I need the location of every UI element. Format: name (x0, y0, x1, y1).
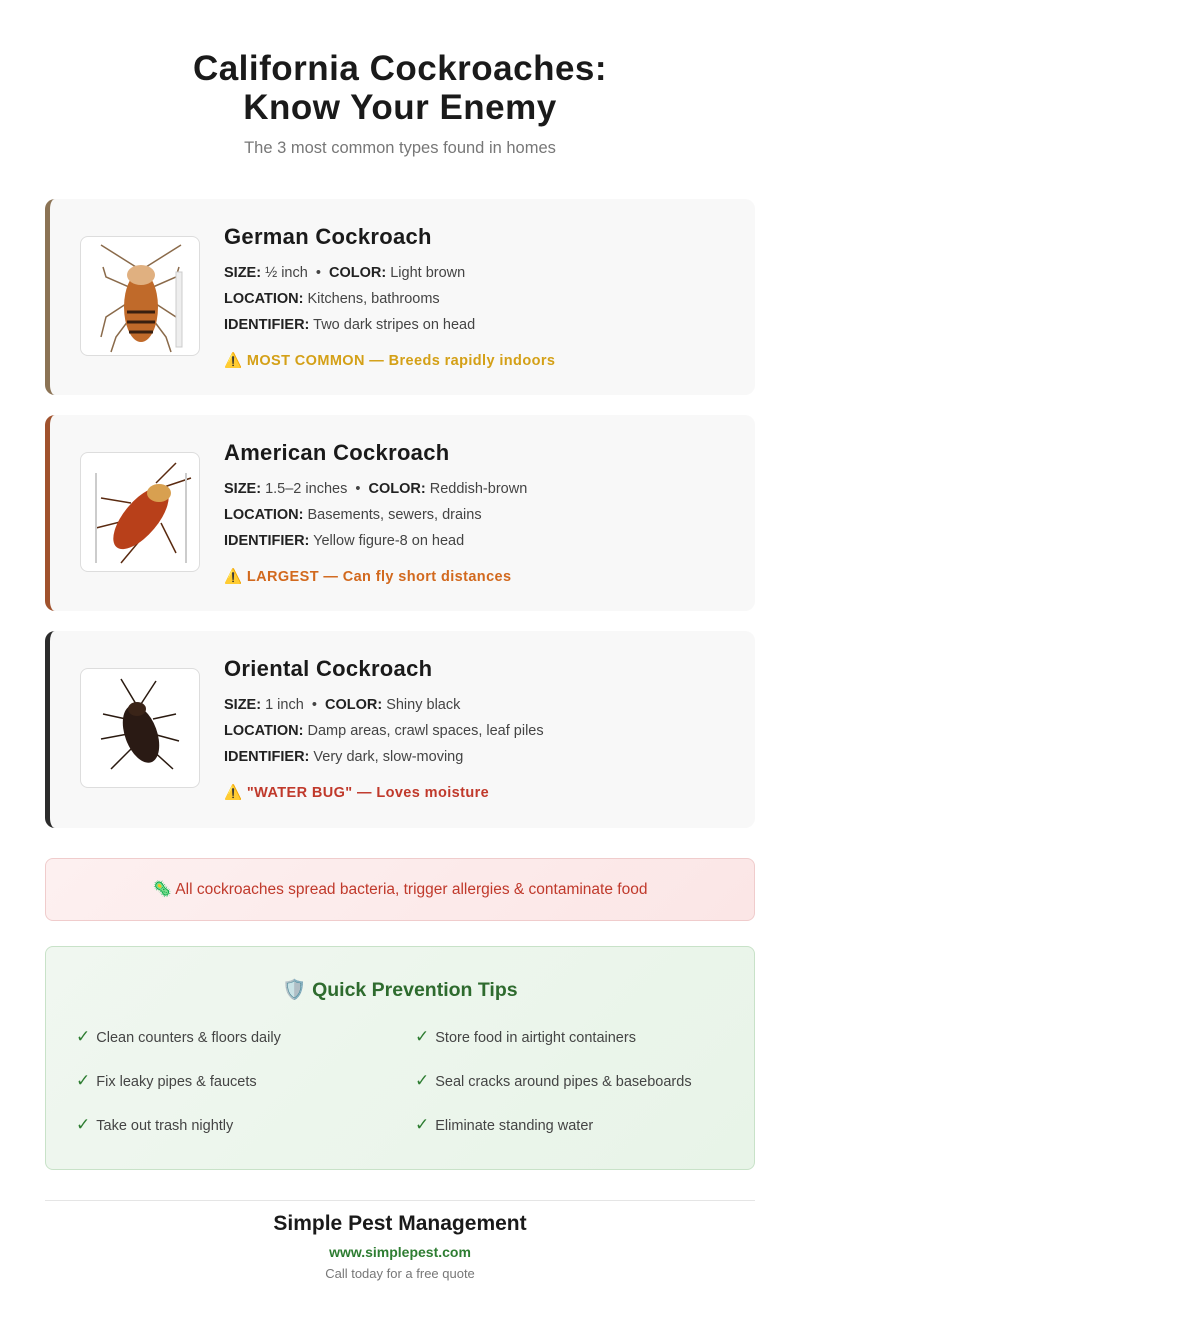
text: german details: LOCATION: Kitchens, bathrooms (224, 291, 440, 307)
tip list (76, 1027, 692, 1134)
subtitle: The 3 most common types found in homes (244, 139, 556, 157)
footer (273, 1212, 527, 1281)
heading: tips: 🛡️ Quick Prevention Tips (282, 979, 518, 1001)
text: american details: IDENTIFIER: Yellow figure-8 on head (224, 533, 464, 549)
text: oriental details (224, 656, 544, 801)
callout: health warning (45, 858, 755, 921)
callout: health warning: 🦠 All cockroaches spread bacteria, trigger allergies & contaminate food (153, 881, 647, 898)
text: german details: IDENTIFIER: Two dark stripes on head (224, 317, 475, 333)
title: Know Your Enemy (243, 88, 557, 127)
title (193, 49, 607, 127)
panel: prevention tips: ✓ Fix leaky pipes & faucets (76, 1071, 257, 1090)
text: american details: SIZE: 1.5–2 inches • COLOR: Reddish-brown (224, 481, 527, 497)
panel: oriental cockroach (45, 631, 755, 828)
panel: prevention tips (45, 946, 755, 1170)
text: oriental details: ⚠️ "WATER BUG" — Loves moisture (224, 785, 489, 801)
text: oriental details: Oriental Cockroach (224, 656, 432, 681)
panel: prevention tips: ✓ Store food in airtight containers (415, 1027, 636, 1046)
text: oriental details: LOCATION: Damp areas, crawl spaces, leaf piles (224, 723, 544, 739)
text: german details (224, 224, 555, 369)
title: California Cockroaches: (193, 49, 607, 88)
icon: oriental cockroach (80, 668, 200, 788)
panel: german cockroach (45, 199, 755, 395)
text: american details (224, 440, 527, 585)
text: german details: ⚠️ MOST COMMON — Breeds rapidly indoors (224, 353, 555, 369)
text: german details: SIZE: ½ inch • COLOR: Light brown (224, 265, 465, 281)
text: oriental details: SIZE: 1 inch • COLOR: Shiny black (224, 697, 460, 713)
text: german details: German Cockroach (224, 224, 432, 249)
text: american details: American Cockroach (224, 440, 450, 465)
panel: prevention tips: ✓ Seal cracks around pipes & baseboards (415, 1071, 692, 1090)
panel: prevention tips: ✓ Take out trash nightly (76, 1115, 233, 1134)
text: american details: LOCATION: Basements, sewers, drains (224, 507, 482, 523)
icon: german cockroach (80, 236, 200, 356)
icon: american cockroach (80, 452, 200, 572)
panel: prevention tips: ✓ Eliminate standing water (415, 1115, 593, 1134)
panel: american cockroach (45, 415, 755, 611)
footer: Simple Pest Management (273, 1212, 527, 1235)
text: oriental details: IDENTIFIER: Very dark, slow-moving (224, 749, 463, 765)
footer: Call today for a free quote (325, 1266, 475, 1281)
panel: prevention tips: ✓ Clean counters & floors daily (76, 1027, 281, 1046)
text: american details: ⚠️ LARGEST — Can fly short distances (224, 569, 511, 585)
footer: www.simplepest.com (329, 1244, 471, 1260)
